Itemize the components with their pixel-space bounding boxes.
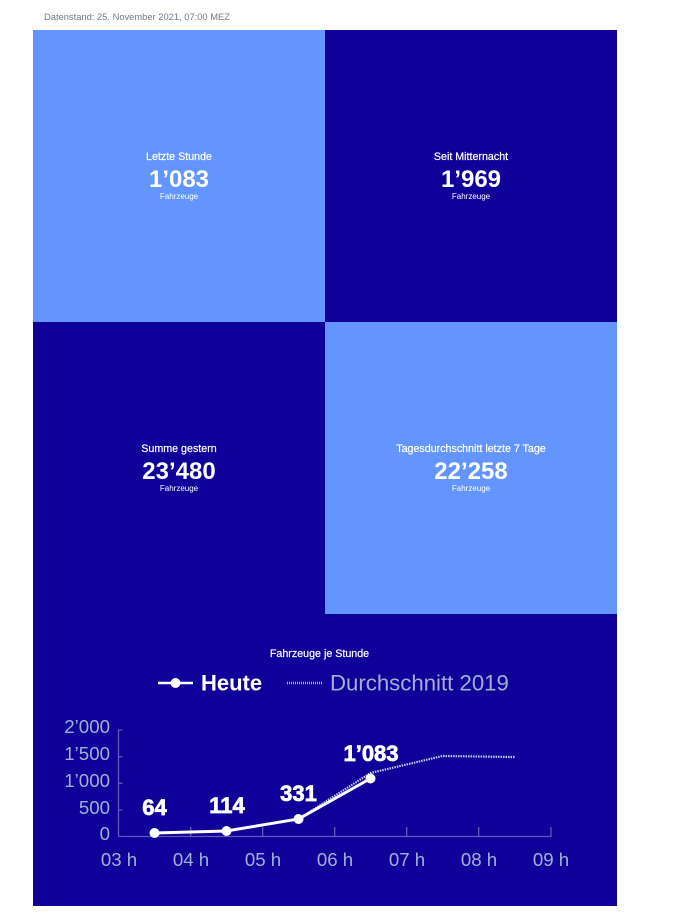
label: since midnight: Seit Mitternacht [434,150,508,162]
data labels: 331 [280,781,317,806]
data labels: 1’083 [343,741,399,766]
legend: today [158,670,262,696]
panel: last hour [33,30,325,322]
panel: hourly chart [33,614,617,906]
value: daily average: 22’258 [434,458,508,485]
value: last hour: 1’083 [149,166,209,193]
x axis labels: 03 h [101,849,137,870]
panel: total yesterday [33,322,325,614]
data labels: 64 [142,795,167,820]
unit: last hour: Fahrzeuge [160,192,198,201]
panel: since midnight [325,30,617,322]
data labels [142,741,399,820]
x axis labels: 06 h [317,849,353,870]
y axis labels: 1’000 [64,770,110,791]
x axis labels [101,849,569,870]
data timestamp: Datenstand: 25. November 2021, 07:00 MEZ [44,12,230,22]
x axis labels: 09 h [533,849,569,870]
legend: average 2019: Durchschnitt 2019 [330,670,509,696]
x axis labels: 05 h [245,849,281,870]
x axis labels: 04 h [173,849,209,870]
label: last hour: Letzte Stunde [146,150,212,162]
label: total yesterday: Summe gestern [141,442,217,454]
label: daily average: Tagesdurchschnitt letzte 7 Tage [396,442,546,454]
line: average 2019 [298,756,514,819]
y axis labels [64,716,110,844]
y axis labels: 2’000 [64,716,110,737]
y axis labels: 0 [100,823,110,844]
value: total yesterday: 23’480 [142,458,216,485]
legend: today: Heute [201,670,262,696]
chart title: Fahrzeuge je Stunde [270,648,369,660]
x axis labels: 08 h [461,849,497,870]
panel: daily average last 7 days [325,322,617,614]
y axis labels: 500 [79,797,110,818]
x axis labels: 07 h [389,849,425,870]
value: since midnight: 1’969 [441,166,501,193]
y axis [118,730,122,836]
line: today [150,774,376,838]
unit: total yesterday: Fahrzeuge [160,484,198,493]
unit: daily average: Fahrzeuge [452,484,490,493]
data labels: 114 [209,793,246,818]
unit: since midnight: Fahrzeuge [452,192,490,201]
y axis labels: 1’500 [64,743,110,764]
x axis [118,827,551,836]
